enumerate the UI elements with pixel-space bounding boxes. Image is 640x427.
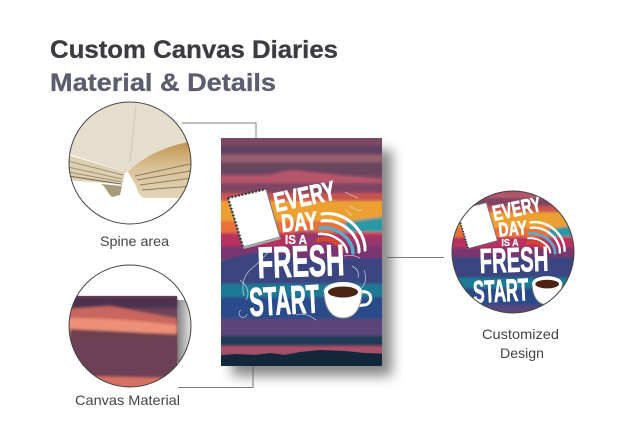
left page stack [70,156,125,186]
open book pages [70,102,187,173]
cover lettering [250,180,344,316]
connector: diary to customized design [387,256,444,258]
diary shadow [232,150,392,376]
canvas texture bands [70,296,177,380]
circle: customized design detail: START [472,271,529,310]
title: Custom Canvas Diaries [50,36,338,64]
subtitle: Material & Details [50,69,276,97]
circle: customized design detail: IS A [501,238,519,249]
cover lettering: DAY [280,207,319,238]
circle: canvas material detail [68,264,192,388]
diary cover [221,138,382,366]
circle: customized design detail: FRESH [479,241,549,281]
right page stack [128,142,195,198]
circle: customized design detail: EVERY [490,192,543,226]
cover lettering: FRESH [257,236,345,288]
label: customized design: Customized [482,326,559,342]
label: customized design: Design [500,345,544,361]
cover icon: notebook [228,189,281,249]
cover tree silhouette [221,350,382,366]
cover icon: coffee cup [324,282,371,318]
label: customized design [482,326,559,361]
connector: spine area to diary [182,123,256,138]
cover lettering: EVERY [271,176,338,218]
cover lettering: IS A [285,232,308,247]
cover sunset background [221,138,382,356]
label: spine area: Spine area [100,233,169,249]
cover doodles [239,192,366,320]
cover lettering: START [248,277,320,325]
connector: canvas material to diary [178,366,253,388]
circle: customized design detail: DAY [497,217,528,242]
cover icon: rainbow [318,214,365,253]
circle: spine area detail [65,100,195,225]
circle: customized design detail [452,190,574,314]
cover edge shadow [177,300,190,362]
label: canvas material: Canvas Material [75,392,180,408]
